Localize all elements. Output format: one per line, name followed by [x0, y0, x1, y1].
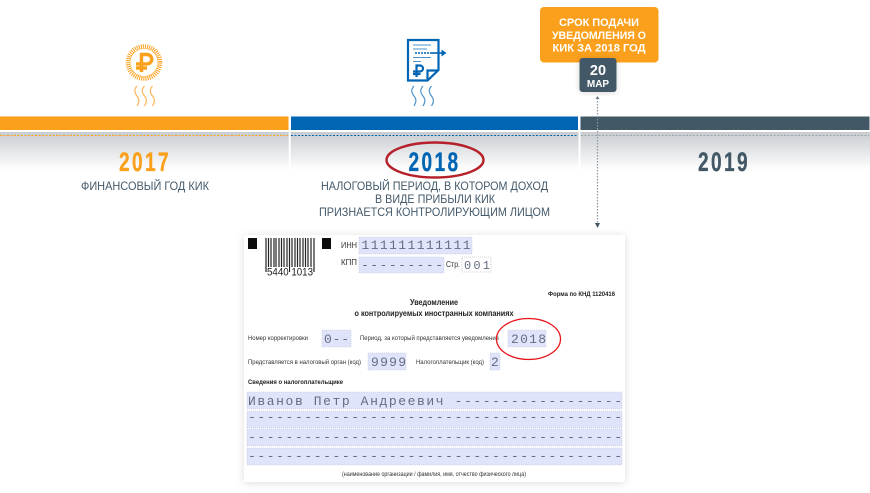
text: KPP field: 001 [464, 259, 490, 273]
text: tax period description: НАЛОГОВЫЙ ПЕРИОД, В КОТОРОМ ДОХОД [321, 178, 548, 193]
text: tax authority and payer fields: Налогоплательщик (код) [416, 359, 484, 366]
table: taxpayer name rows [247, 392, 622, 465]
text: KPP field: КПП [341, 257, 357, 267]
icon: barcode: 5440 1013 [267, 266, 313, 278]
highlight: red ellipse around 2018 [386, 142, 484, 178]
text: KPP field: Стр. [446, 260, 460, 269]
text: KPP field: --------- [361, 258, 443, 273]
text: period field: Период, за который представляется уведомление [360, 334, 499, 342]
table: taxpayer name rows: ---------------------------------------- [248, 449, 622, 464]
text: correction number field [248, 330, 351, 347]
heading: year 2018: 2018 [408, 147, 461, 177]
text: tax authority and payer fields: Представляется в налоговый орган (код) [248, 358, 361, 366]
panel: notification form [244, 235, 625, 482]
callout: date 20 March: 20 [590, 63, 606, 79]
text: tax period description [319, 178, 550, 219]
text: tax authority and payer fields: 9999 [371, 355, 406, 370]
text: period field: 2018 [511, 332, 546, 347]
callout: filing deadline: КИК ЗА 2018 ГОД [552, 42, 646, 54]
icon: form corner markers [248, 238, 331, 249]
text: INN field: ИНН [341, 240, 357, 250]
bar: 2018 segment [291, 116, 578, 136]
text: KPP field [341, 257, 491, 273]
callout: date 20 March [580, 58, 616, 92]
text: correction number field: 0-- [324, 332, 349, 347]
callout: filing deadline: УВЕДОМЛЕНИЯ О [552, 30, 646, 42]
table: taxpayer name rows: ---------------------------------------- [248, 410, 622, 425]
table: taxpayer name rows: ---------------------------------------- [248, 430, 622, 445]
heading: form title: о контролируемых иностранных компаниях [354, 309, 514, 318]
text: financial year label: ФИНАНСОВЫЙ ГОД КИК [81, 178, 209, 193]
heading: year 2017: 2017 [119, 147, 171, 177]
text: correction number field: Номер корректировки [248, 335, 308, 342]
table: taxpayer name rows: Иванов Петр Андреевич ------------------ [248, 394, 622, 409]
panel: timeline gradient band [0, 132, 870, 170]
icon: barcode [266, 238, 314, 278]
text: name caption: (наименование организации / фамилия, имя, отчество физического лица) [342, 471, 526, 478]
text: tax authority and payer fields [248, 353, 500, 370]
icon: ruble coin with heat waves [128, 46, 160, 106]
heading: form title [354, 298, 514, 318]
text: tax period description: В ВИДЕ ПРИБЫЛИ КИК [375, 192, 495, 206]
text: tax period description: ПРИЗНАЕТСЯ КОНТРОЛИРУЮЩИМ ЛИЦОМ [319, 205, 550, 219]
text: INN field: 111111111111 [362, 238, 471, 253]
text: form code: Форма по КНД 1120416 [548, 291, 615, 298]
icon: tax document with arrow and heat waves [408, 40, 446, 106]
heading: year 2019: 2019 [698, 147, 750, 177]
callout: filing deadline [540, 7, 658, 62]
bar: 2017 segment [0, 116, 288, 136]
text: period field [360, 330, 546, 347]
highlight: red ellipse around period 2018 [496, 318, 560, 360]
callout: date 20 March: МАР [587, 79, 609, 90]
callout: filing deadline: СРОК ПОДАЧИ [559, 17, 639, 29]
heading: form title: Уведомление [410, 298, 458, 307]
text: taxpayer section heading: Сведения о налогоплательщике [248, 379, 343, 386]
text: tax authority and payer fields: 2 [491, 355, 499, 370]
bar: 2019 segment [580, 116, 870, 136]
arrow: deadline dotted line [595, 96, 600, 228]
